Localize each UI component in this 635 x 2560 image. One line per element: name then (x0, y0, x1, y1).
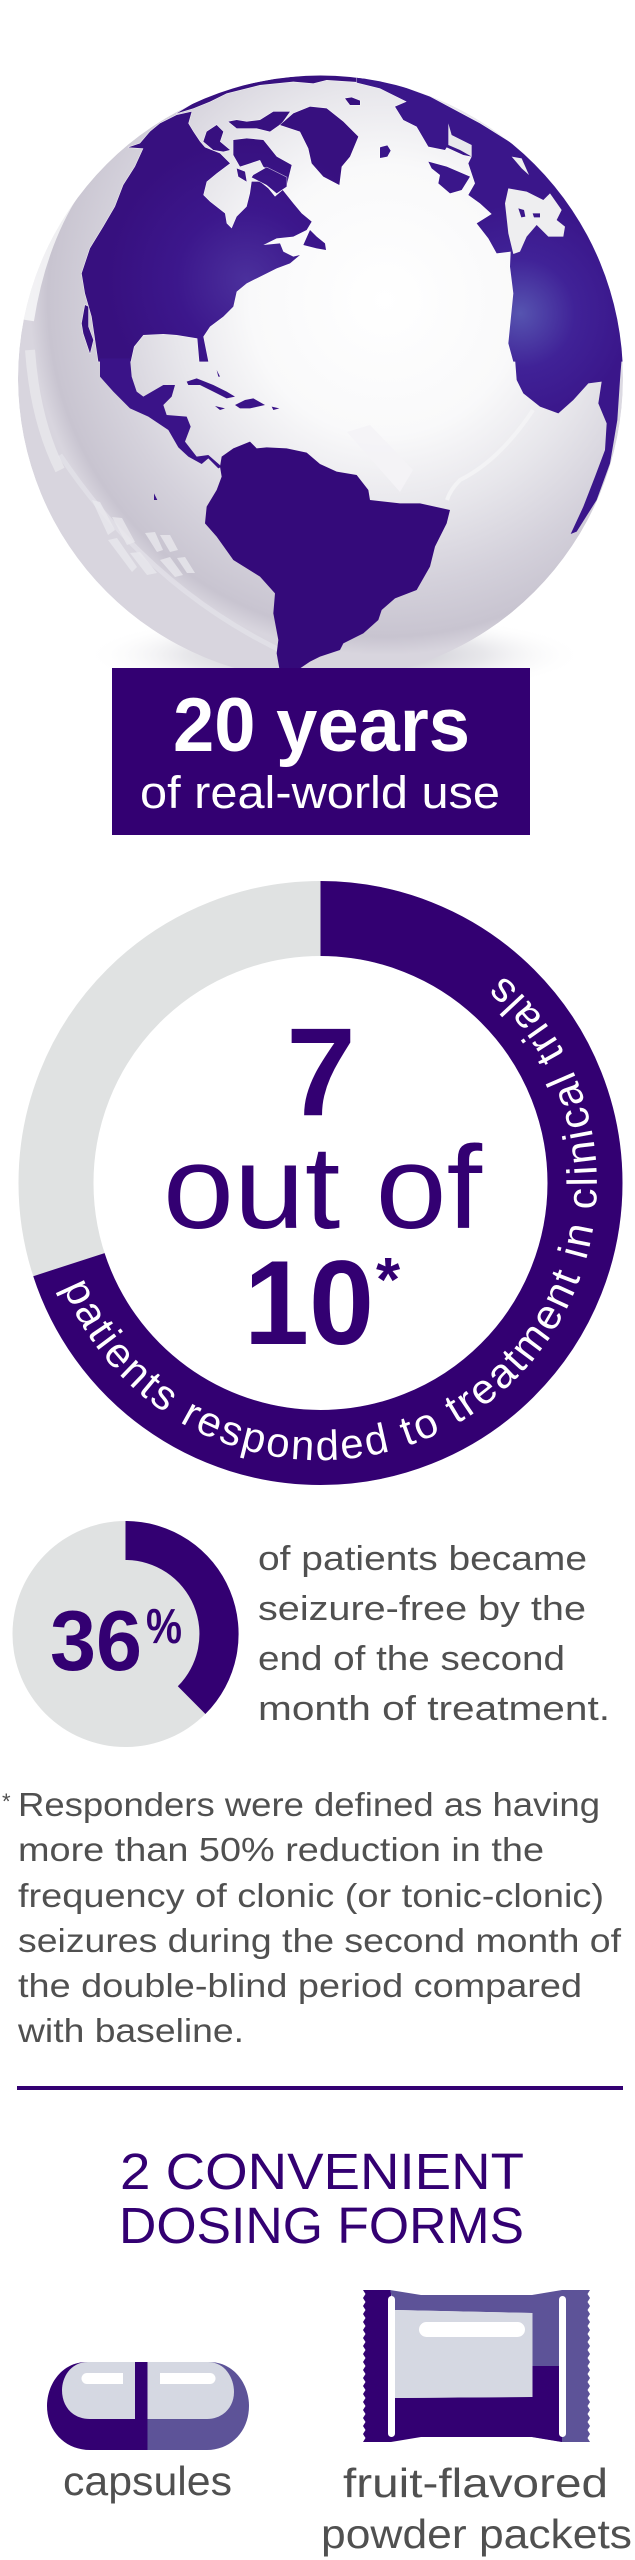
label: fruit-flavored powder packets: powder packets (321, 2511, 632, 2557)
globe ground shadow (85, 613, 585, 697)
Europe and northern Africa rim (357, 73, 623, 362)
sub-label: of real-world use: of real-world use (140, 767, 500, 818)
footnote: seizures during the second month of (18, 1922, 622, 1959)
description: of patients became (258, 1540, 587, 1578)
footnote: with baseline. (17, 2012, 244, 2049)
description: seizure-free by the (258, 1590, 586, 1628)
description (258, 1540, 610, 1728)
footnote: frequency of clonic (or tonic-clonic) (18, 1877, 604, 1914)
percent sign: % (146, 1600, 182, 1654)
big text: out of: out of (163, 1122, 482, 1254)
Britain (428, 162, 470, 193)
footnote (2, 1786, 622, 2049)
ring track (56, 918, 585, 1448)
Mediterranean (505, 188, 565, 254)
heading: 2 convenient dosing forms: 2 CONVENIENT (120, 2143, 524, 2200)
big number: 10: 10 (244, 1236, 374, 1370)
continents (82, 73, 623, 668)
globe sphere (18, 76, 623, 680)
asterisk: * (376, 1246, 401, 1315)
Caribbean islands (154, 370, 279, 500)
globe (18, 73, 623, 681)
label: capsules: capsules (63, 2458, 232, 2504)
icon: powder packet (363, 2290, 590, 2442)
Greenland (280, 107, 358, 185)
Iceland (380, 145, 391, 158)
footnote: the double-blind period compared (18, 1967, 582, 2004)
footnote: more than 50% reduction in the (18, 1831, 544, 1868)
description: end of the second (258, 1640, 565, 1678)
heading: 2 convenient dosing forms (119, 2143, 524, 2254)
Africa (515, 358, 622, 534)
number: 36: 36 (50, 1594, 142, 1689)
label: 20 years of real-world use (112, 668, 530, 835)
ring 70 percent segment (56, 918, 585, 1448)
label: fruit-flavored powder packets: fruit-flavored (343, 2460, 608, 2506)
Arctic islands (203, 112, 292, 193)
Baja California (82, 305, 93, 353)
description: month of treatment. (258, 1690, 610, 1728)
South America (205, 442, 450, 668)
label: fruit-flavored powder packets (321, 2460, 632, 2557)
curved caption: patients responded to treatment in clinical trials (56, 978, 597, 1460)
donut (12, 1521, 239, 1747)
icon: capsule (47, 2362, 249, 2450)
Newfoundland (303, 230, 326, 250)
footnote: Responders were defined as having (18, 1786, 600, 1823)
panel: 7 out of 10 responder ring (18, 881, 622, 1485)
panel: 36 percent seizure-free (12, 1521, 610, 1747)
big number: 7: 7 (286, 1003, 356, 1142)
North America (82, 75, 367, 362)
headline: 20 years: 20 years (173, 683, 470, 768)
Central and South America (100, 358, 450, 668)
panel: globe with years of use (18, 73, 623, 835)
sphere reflections (26, 135, 533, 655)
heading: 2 convenient dosing forms: DOSING FORMS (119, 2197, 524, 2254)
footnote: * (2, 1789, 11, 1814)
Arctic rim (177, 75, 367, 113)
